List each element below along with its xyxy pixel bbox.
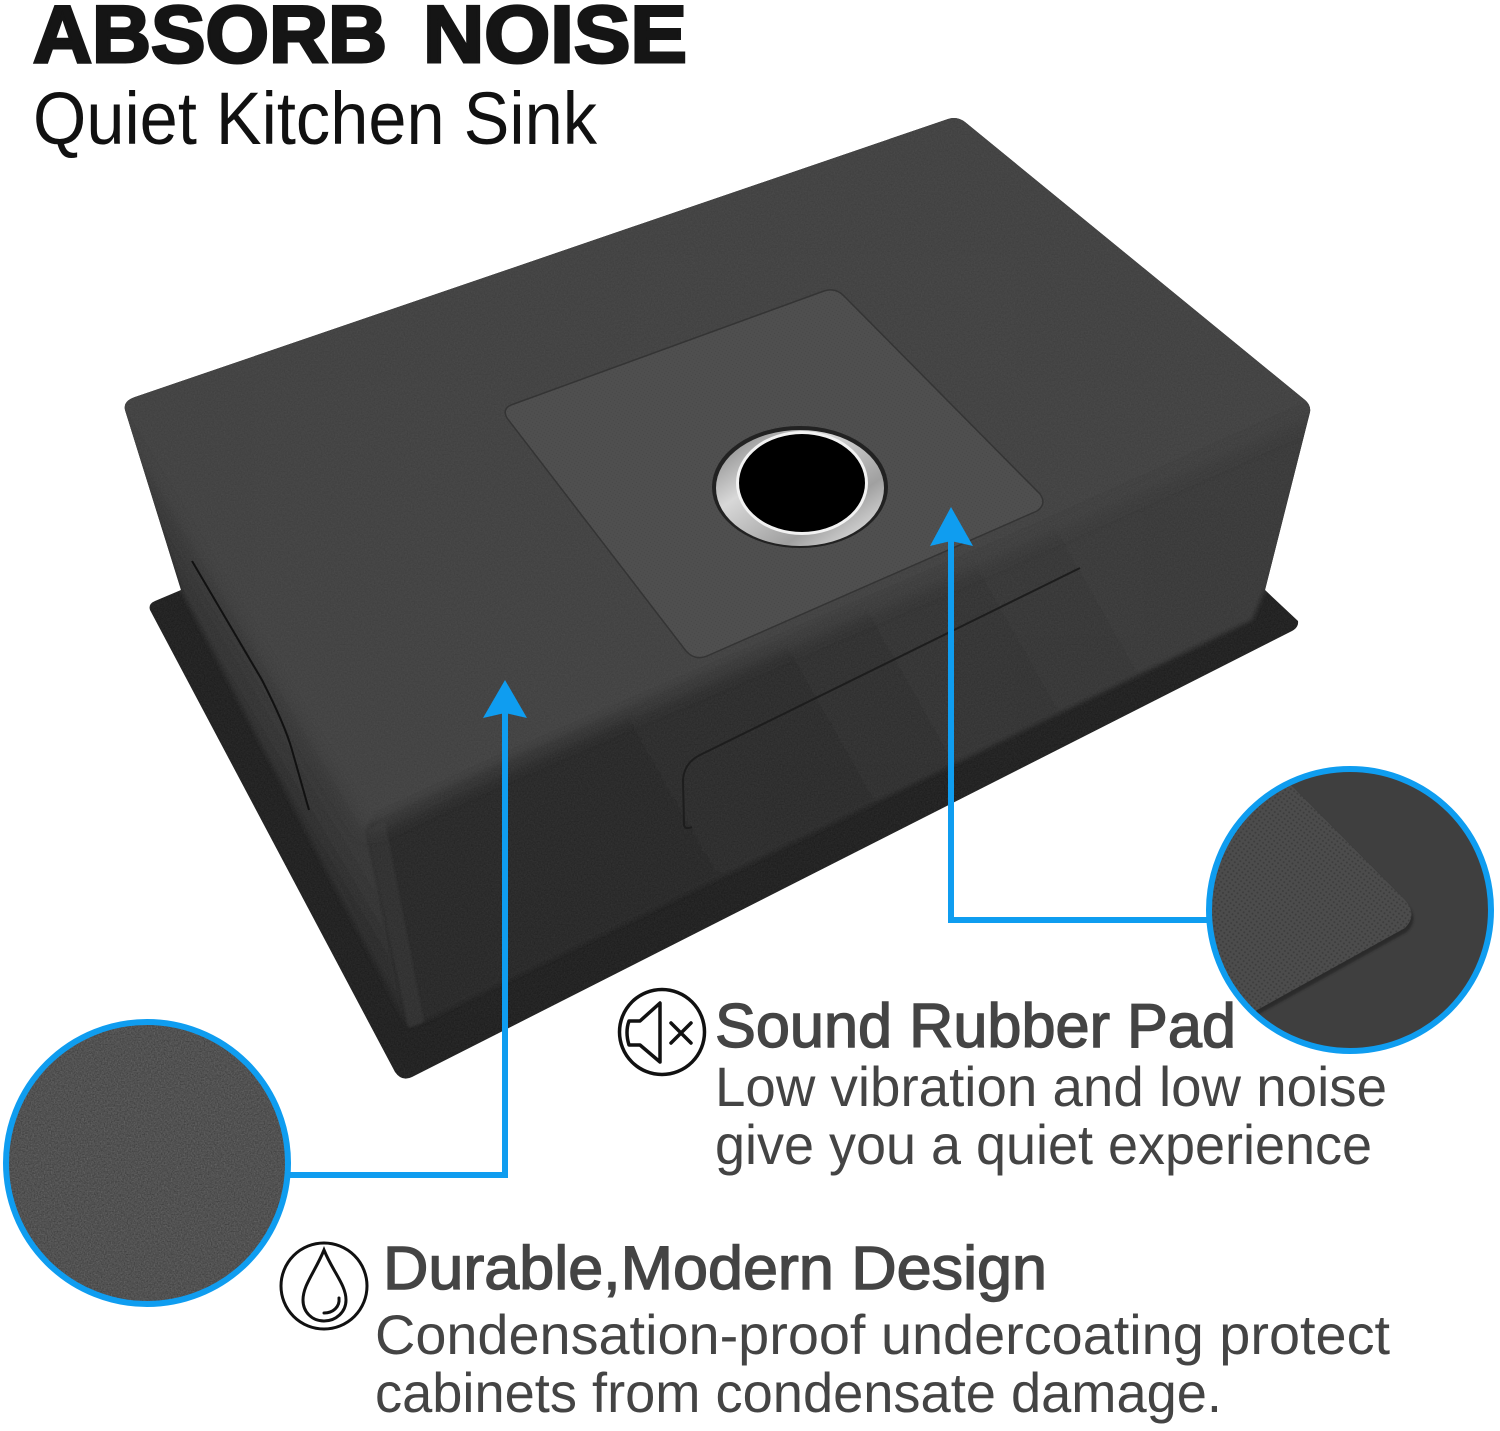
heading: Sound Rubber Pad: Sound Rubber Pad [715,992,1236,1061]
detail circle: coating texture [6,1022,288,1304]
embossed front panel [683,568,1080,828]
subtitle: Quiet Kitchen Sink: Quiet Kitchen Sink [33,77,598,160]
icon: muted speaker [620,990,704,1074]
text: pad description: give you a quiet experience [715,1113,1372,1176]
text: coating description: cabinets from condensate damage. [375,1361,1222,1424]
text: coating description [375,1303,1390,1424]
right arrow [930,507,1210,920]
title: ABSORB NOISE [33,0,687,80]
side handle slit [192,561,309,810]
left arrow [288,680,527,1175]
text: coating description: Condensation-proof undercoating protect [375,1303,1390,1366]
flange [125,118,1310,1079]
rubber pad [505,290,1043,658]
detail circle: pad corner [1180,769,1491,1051]
drain hole [712,426,888,548]
text: pad description [715,1055,1387,1176]
sink walls and base [90,85,1350,1085]
heading: Durable, Modern Design: Durable,Modern Design [383,1234,1047,1302]
sink underside [90,85,1350,1085]
icon: water drop [281,1243,367,1329]
text: pad description: Low vibration and low noise [715,1055,1387,1118]
